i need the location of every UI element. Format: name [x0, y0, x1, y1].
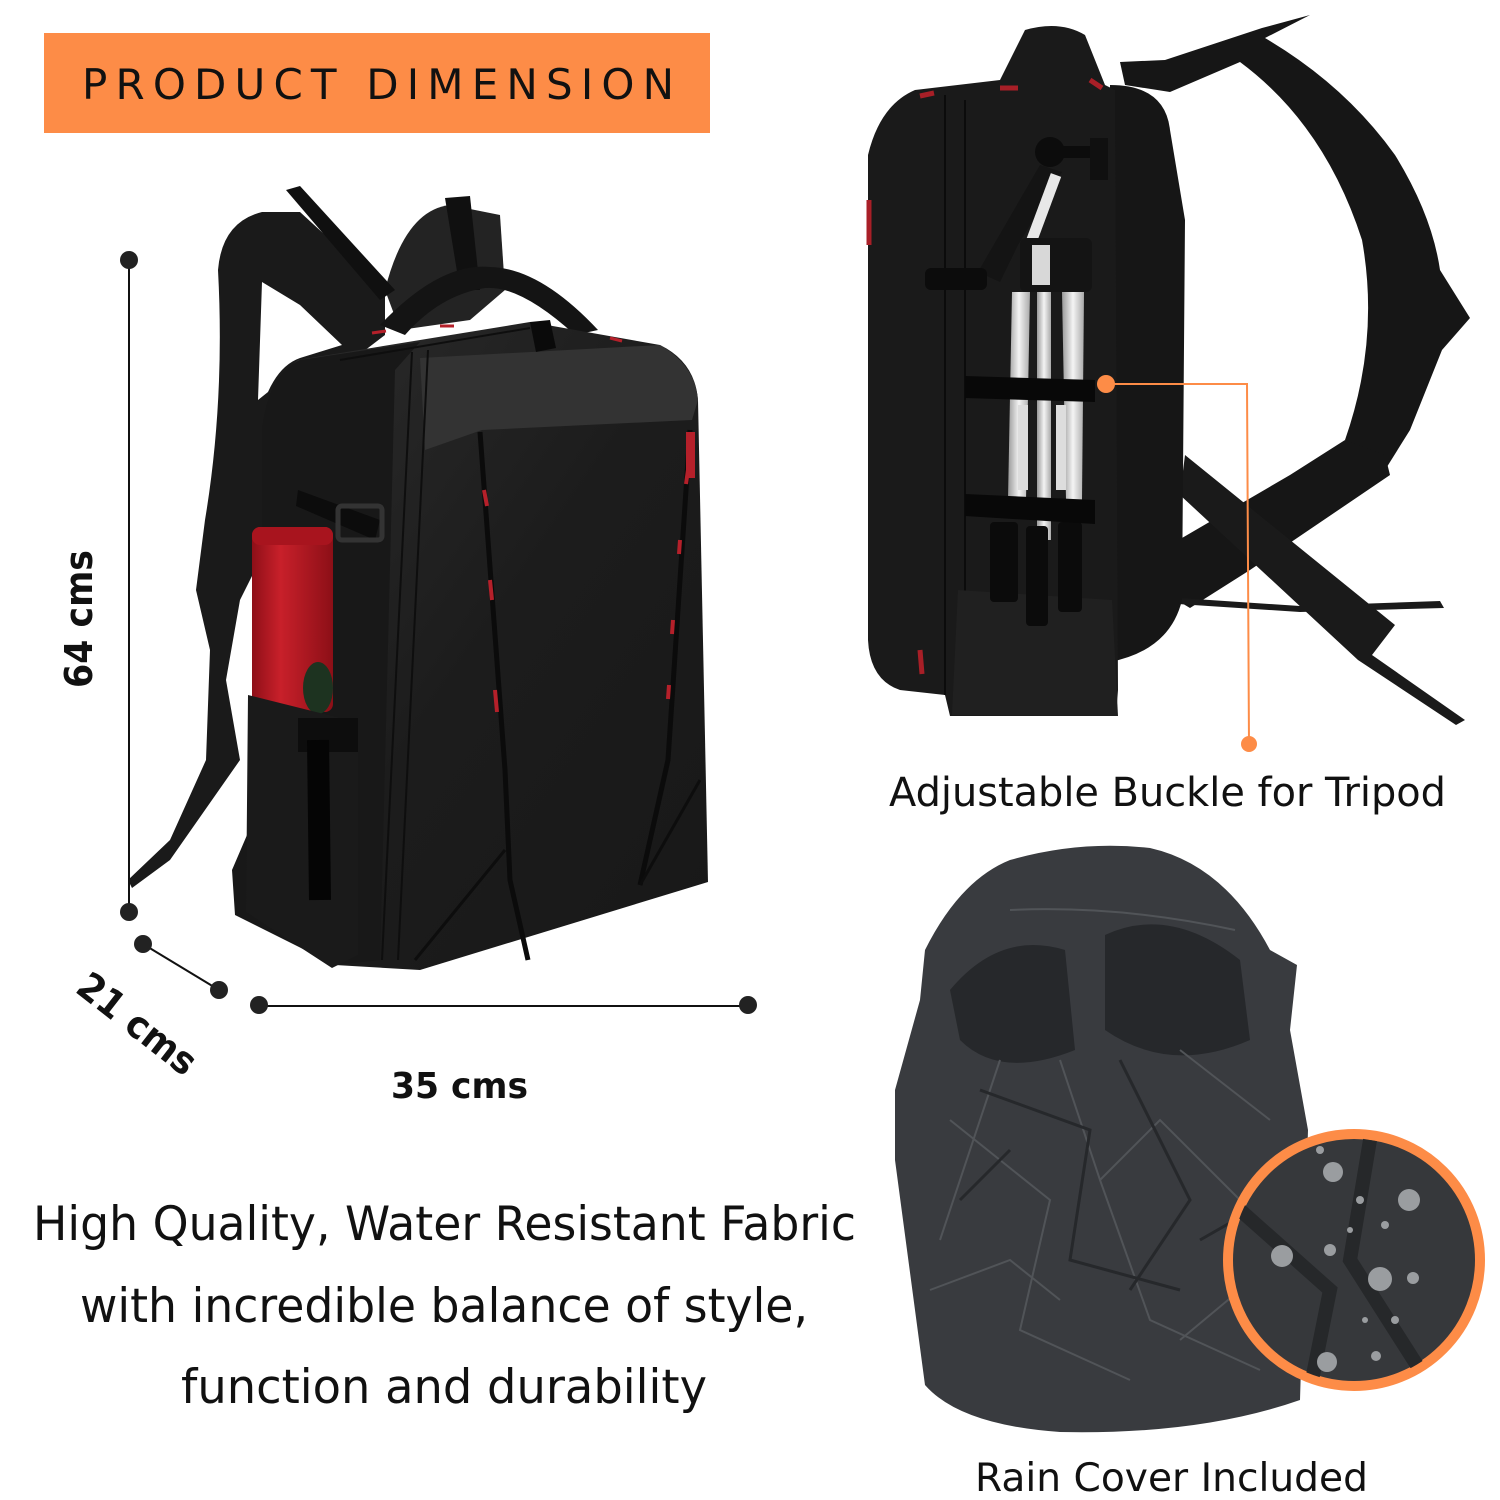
back panel [1110, 85, 1185, 662]
rain cover [895, 846, 1308, 1432]
fabric description [33, 1197, 856, 1415]
label: rain cover: Rain Cover Included [975, 1456, 1368, 1500]
dimension: width: 35 cms [391, 1066, 528, 1107]
callout line: tripod buckle [1097, 375, 1257, 752]
backpack side view with tripod [868, 15, 1470, 725]
fabric description: High Quality, Water Resistant Fabric [33, 1197, 856, 1252]
main body [868, 26, 1118, 716]
shoulder strap [1120, 15, 1470, 470]
dimension: depth: 21 cms [68, 963, 206, 1084]
backpack front view [128, 186, 708, 970]
dimension: height [57, 251, 138, 921]
crossed lower straps [1160, 440, 1390, 608]
fabric description: function and durability [181, 1360, 707, 1415]
title: PRODUCT DIMENSION [82, 60, 674, 109]
title [44, 33, 710, 133]
tripod [925, 137, 1108, 626]
water bottle [252, 527, 333, 714]
fabric description: with incredible balance of style, [80, 1279, 808, 1334]
dimension: width [250, 996, 757, 1107]
label: tripod buckle: Adjustable Buckle for Tripod [889, 770, 1446, 816]
dimension: height: 64 cms [57, 550, 101, 688]
inset: water droplets [1228, 1134, 1480, 1390]
